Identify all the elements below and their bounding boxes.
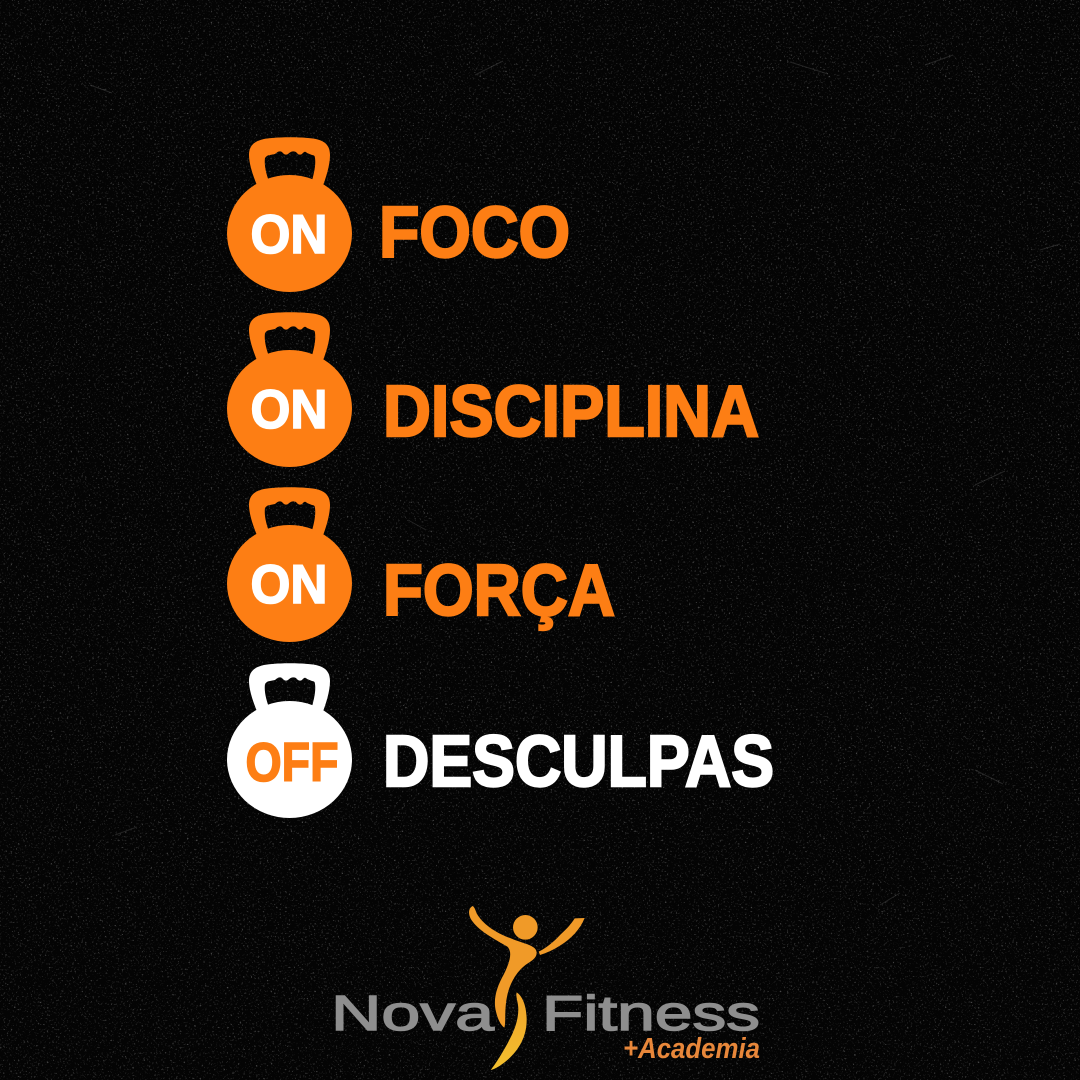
icon: jumping figure: [469, 906, 585, 1070]
label: OFF: OFF: [246, 731, 338, 793]
label: ON: ON: [250, 378, 328, 440]
wordmark: Academia: +Academia: [623, 1033, 760, 1065]
heading: DESCULPAS: DESCULPAS: [383, 722, 774, 802]
wordmark: Fitness: Fitness: [542, 987, 760, 1041]
row: DESCULPAS off: [227, 663, 774, 818]
row: DISCIPLINA on: [227, 312, 759, 467]
icon: orange kettlebell: [227, 137, 352, 292]
label: ON: ON: [250, 203, 328, 265]
icon: orange kettlebell: [227, 312, 352, 467]
label: ON: ON: [250, 553, 328, 615]
icon: orange kettlebell: [227, 487, 352, 642]
heading: FOCO: FOCO: [379, 193, 570, 273]
icon: white kettlebell: [227, 663, 352, 818]
heading: FORÇA: FORÇA: [383, 551, 615, 631]
row: FORÇA on: [227, 487, 615, 642]
wordmark: Nova: Nova: [331, 987, 495, 1041]
heading: DISCIPLINA: DISCIPLINA: [383, 372, 759, 452]
row: FOCO on: [227, 137, 570, 292]
logo: Nova Fitness Academia: [331, 906, 760, 1070]
